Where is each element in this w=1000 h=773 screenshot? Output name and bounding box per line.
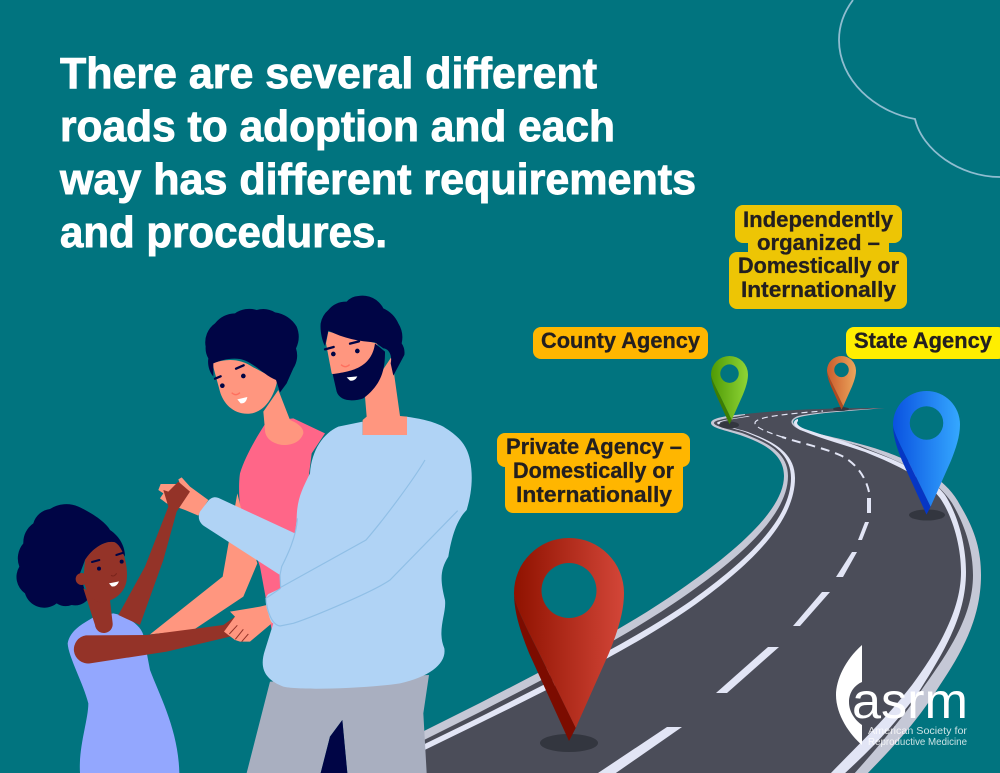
pin: red, private agency	[514, 538, 624, 752]
child neck	[83, 588, 113, 633]
man lower hand	[224, 605, 272, 642]
man neck	[363, 357, 407, 435]
pin: green, county agency	[711, 356, 748, 428]
label: private agency: Internationally	[516, 482, 673, 507]
road right white line	[794, 419, 966, 773]
winding road	[400, 408, 981, 773]
ASRM logo	[836, 645, 968, 748]
label: private agency	[497, 433, 690, 513]
cloud outline	[839, 0, 1000, 177]
woman features	[215, 365, 247, 403]
label: independently organized	[729, 205, 907, 309]
pin: blue, independently organized	[893, 391, 960, 520]
logo wordmark: asrm	[852, 673, 968, 729]
title: roads to adoption and each	[60, 102, 615, 151]
child dress	[68, 613, 179, 773]
woman	[150, 309, 325, 634]
label: county agency: County Agency	[541, 328, 701, 353]
label: private agency: Private Agency –	[506, 434, 682, 459]
family illustration	[16, 296, 472, 773]
label: independently organized: Domestically or	[738, 253, 899, 278]
child	[16, 482, 235, 773]
child features	[92, 553, 124, 586]
child raised arm	[118, 482, 190, 625]
road left edge band	[400, 414, 788, 752]
label: private agency: Domestically or	[513, 458, 674, 483]
woman face	[212, 360, 277, 414]
logo crescent	[836, 645, 862, 745]
road centre dashes	[595, 411, 871, 773]
title: way has different requirements	[59, 155, 696, 204]
child reaching arm	[74, 617, 235, 663]
woman hair	[205, 309, 299, 392]
man hair	[321, 296, 404, 376]
woman arm	[150, 493, 257, 634]
woman shirt	[239, 418, 325, 630]
man sweater	[199, 417, 472, 689]
woman neck	[263, 390, 303, 445]
man upper hand	[158, 477, 208, 516]
man beard	[333, 343, 385, 400]
title: and procedures.	[60, 208, 387, 257]
sweater fold lines	[266, 460, 458, 626]
man face	[326, 332, 383, 380]
man trousers	[247, 675, 429, 773]
man features	[325, 341, 360, 381]
pin: orange, state agency	[827, 356, 856, 411]
label: independently organized: organized –	[757, 230, 880, 255]
logo tagline	[868, 725, 968, 748]
title: There are several different	[60, 49, 597, 98]
title	[59, 49, 696, 257]
label: independently organized: Independently	[743, 207, 894, 232]
road left white line	[400, 416, 795, 762]
logo tagline: American Society for	[868, 725, 968, 737]
logo tagline: Reproductive Medicine	[868, 736, 967, 748]
child hair	[16, 504, 125, 608]
child face	[83, 542, 127, 603]
road surface	[400, 408, 981, 773]
road right edge band	[791, 408, 981, 773]
label: independently organized: Internationally	[741, 277, 897, 302]
label: state agency: State Agency	[854, 328, 993, 353]
